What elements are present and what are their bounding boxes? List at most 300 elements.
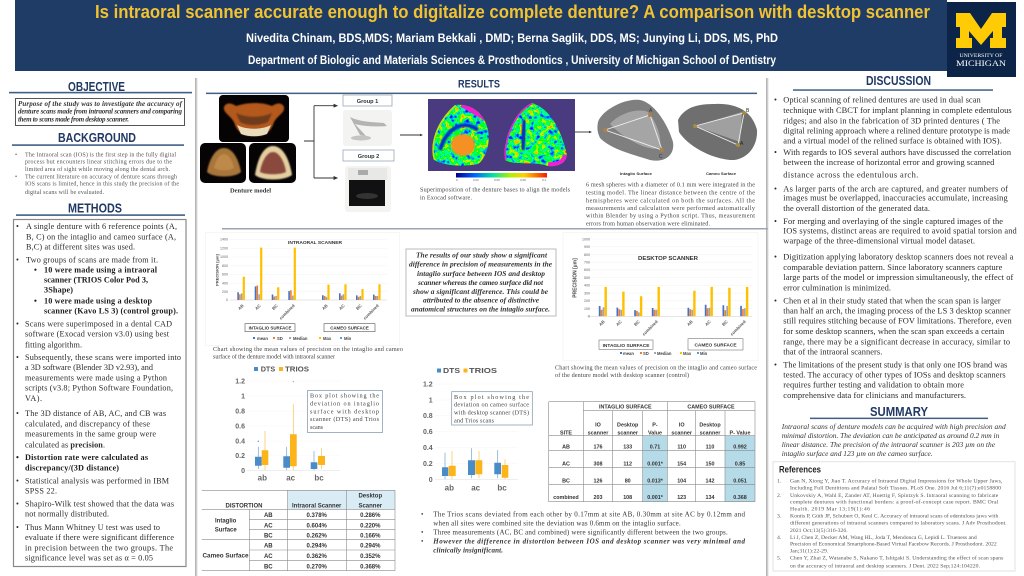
heat map: superimposition: 0.05 <box>494 178 500 182</box>
panel: methods: • <box>16 409 19 418</box>
table: precision by site: 176 <box>594 444 602 450</box>
heat map: superimposition <box>420 99 575 201</box>
panel: methods: scanner (Kavo LS 3) (control group). <box>44 306 178 315</box>
bar chart: intraoral scanner: 0 <box>226 298 228 302</box>
panel: discussion: IOS systems, distinct areas are required to avoid spatial torsion and <box>783 226 1018 235</box>
caption: desktop chart: Chart showing the mean values of precision on the intaglio and cameo surface <box>555 364 757 371</box>
box plot: cameo deviation: ab <box>445 483 454 492</box>
panel: methods: Shapiro-Wilk test showed that the data was <box>25 500 174 509</box>
panel: discussion: comprehensive data for clinicians and manufacturers. <box>783 391 966 400</box>
box plot: cameo deviation: 0 <box>429 477 433 484</box>
table: distortion: 0.362% <box>307 554 328 560</box>
bar chart: desktop scanner: 0 <box>588 314 590 318</box>
table: precision by site: 154 <box>677 461 686 467</box>
bar chart: desktop scanner: 400 <box>584 284 590 288</box>
category labels: combined <box>641 319 659 337</box>
category labels: BC <box>355 303 363 311</box>
panel: references: Including Full Dentitions and Palatal Soft Tissues. PLoS One. 2016 Jul 6;11(7):e0158800 <box>790 484 1001 491</box>
results bullet points: • <box>421 528 424 536</box>
category labels <box>598 319 747 337</box>
caption: desktop chart <box>555 364 757 379</box>
results bullet points: clinically insignificant. <box>433 546 503 554</box>
table: precision by site: scanner <box>671 430 693 436</box>
panel: methods: • <box>16 476 19 485</box>
caption: intraoral chart: Chart showing the mean values of precision on the intaglio and cameo <box>213 346 403 353</box>
panel: background: • <box>15 153 17 159</box>
table: distortion: 0.378% <box>307 513 328 519</box>
category labels: BC <box>633 319 641 327</box>
heat map: superimposition: 0.08 <box>520 178 526 182</box>
table: precision by site: 110 <box>706 444 714 450</box>
panel: methods: • <box>16 320 19 329</box>
table: precision by site: BC <box>562 478 570 484</box>
bar chart: desktop scanner: 1000 <box>582 237 590 241</box>
caption box: and Trios scans <box>454 417 495 424</box>
panel: discussion <box>774 74 1018 400</box>
panel: references: 5. <box>777 556 782 562</box>
heat map: superimposition: 0 <box>456 178 458 182</box>
table: precision by site: 134 <box>706 495 714 501</box>
table: precision by site: SITE <box>560 430 572 436</box>
results bullet points: However the difference in distortion between IOS and desktop scanner was very minimal and <box>432 537 746 545</box>
results bullet points <box>421 511 746 554</box>
bars: max <box>243 248 381 300</box>
callout: key result: show a significant difference. This could be <box>412 287 549 296</box>
denture model photos <box>200 95 296 195</box>
surface models with measurement triangles: B <box>746 108 750 114</box>
panel: references: 4. <box>777 535 782 541</box>
panel: references: on the accuracy of intraoral and desktop scanners. J Dent. 2022 Sep;124:104220. <box>790 562 981 569</box>
callout: key result: attributed to the absence of distinctive <box>423 296 540 305</box>
table: distortion: DISTORTION <box>226 503 262 509</box>
table: precision by site: IO <box>595 423 601 429</box>
panel: methods: • <box>34 266 37 275</box>
table: precision by site: 0.992 <box>733 444 747 450</box>
box plot: cameo deviation: 0.2 <box>423 461 433 468</box>
box plot: cameo deviation: 0.6 <box>423 429 433 436</box>
caption box: with desktop scanner (DTS) <box>454 409 529 416</box>
table: precision by site: 150 <box>706 461 714 467</box>
results bullet points: • <box>421 511 424 519</box>
category labels: combined <box>729 319 747 337</box>
panel: references: Jan;31(1):22-29. <box>790 547 829 554</box>
heading: methods: METHODS <box>68 202 122 216</box>
affiliation: Department of Biologic and Materials Sciences & Prosthodontics , University of Michigan School of Dentistry <box>248 53 776 67</box>
table: distortion: BC <box>264 533 273 539</box>
table: precision by site: scanner <box>617 430 639 436</box>
text: mesh spheres method: measurements and calculation were performed automatically <box>586 205 756 212</box>
results bullet points: • <box>421 537 424 545</box>
bar chart: intraoral scanner <box>206 232 400 346</box>
panel: objective: them to scans made from desktop scanner. <box>18 116 129 124</box>
panel: references: Chen Y, Zhai Z, Watanabe S, Nakano T, Ishigaki S. Understanding the effect of scan spans <box>790 555 1004 562</box>
panel: discussion: tested. The accuracy of other types of IOSs and desktop scanners <box>783 370 1006 379</box>
legend: TRIOS <box>469 366 497 375</box>
panel: methods: Scans were superimposed in a dental CAD <box>25 320 172 329</box>
callout: key result: scanner whereas the cameo surface did not <box>417 278 544 287</box>
heading: background: BACKGROUND <box>58 131 136 145</box>
panel: discussion: still requires stitching because of FOV limitations. Therefore, even <box>783 317 1013 326</box>
bar chart: desktop scanner: 300 <box>584 291 590 295</box>
table: precision by site: IO <box>679 423 685 429</box>
chart legend: mean <box>257 336 268 341</box>
table: precision by site: INTAGLIO SURFACE <box>599 405 652 411</box>
panel: methods: in precision between the two groups. The <box>25 543 173 552</box>
category labels: combined <box>278 303 296 321</box>
box plot: cameo deviation <box>423 366 532 492</box>
table: precision by site: Desktop <box>699 423 721 429</box>
text: mesh spheres method: 6 mesh spheres with a diameter of 0.1 mm were integrated in the <box>586 182 755 189</box>
chart legend: SD <box>277 336 283 341</box>
label: intaglio surface: INTAGLIO SURFACE <box>249 326 291 331</box>
panel: background: • <box>15 174 17 180</box>
caption box: deviation on intaglio <box>310 401 379 408</box>
table: distortion: 0.286% <box>360 513 381 519</box>
label: intaglio surface: Intaglio Surface <box>620 172 652 176</box>
bar chart: desktop scanner: 700 <box>584 260 590 264</box>
bar chart: desktop scanner: 500 <box>584 276 590 280</box>
caption: superimposition: Superimposition of the denture bases to align the models <box>420 187 571 194</box>
table: precision by site: AC <box>562 461 570 467</box>
panel: discussion: warpage of the three-dimensional virtual model dataset. <box>783 236 975 245</box>
panel: discussion: • <box>774 96 777 105</box>
panel: references: 2021 Oct;13(5):316-326. <box>790 527 848 534</box>
panel: methods: significance level was set as α = 0.05 <box>25 554 153 563</box>
panel: objective: Purpose of the study was to investigate the accuracy of <box>18 100 183 108</box>
heat map: superimposition: 0.02 <box>473 178 479 182</box>
bar chart: intraoral scanner: 1000 <box>220 255 228 259</box>
panel: methods: 10 were made using a desktop <box>44 296 152 305</box>
panel: discussion: Chen et al in their study stated that when the scan span is larger <box>783 296 1001 305</box>
panel: methods: evaluate if there were significant difference <box>25 533 174 542</box>
table: precision by site: 203 <box>594 495 602 501</box>
color scale <box>456 173 547 178</box>
bars: median <box>241 293 378 300</box>
table: precision by site: scanner <box>700 430 721 436</box>
panel: methods: • <box>16 353 19 362</box>
category labels: AB <box>598 319 606 327</box>
bar chart: desktop scanner: 900 <box>584 245 590 249</box>
table: distortion: 0.368% <box>360 564 381 570</box>
chart legend: mean <box>623 351 634 356</box>
heading: results: RESULTS <box>458 78 500 90</box>
chart title: INTRAORAL SCANNER <box>288 240 343 245</box>
table: distortion: AB <box>264 513 273 519</box>
table: distortion <box>202 490 395 571</box>
category labels: combined <box>362 303 380 321</box>
panel: references: 1. <box>777 479 782 485</box>
panel: methods: B,C) at different sites was used. <box>26 242 135 251</box>
bars: mean <box>237 286 375 300</box>
panel: background: process but encounters linear stitching errors due to the <box>25 160 172 166</box>
heading: references: References <box>779 464 821 475</box>
table: precision by site: 104 <box>677 478 686 484</box>
text: mesh spheres method <box>586 182 756 228</box>
table: distortion: Desktop <box>358 494 382 500</box>
group 1: intraoral scanner: Group 1 <box>357 99 378 105</box>
table: distortion: Surface <box>215 527 237 533</box>
bars: sd <box>239 286 376 300</box>
category labels: AC <box>704 319 712 327</box>
panel: methods: Two groups of scans are made from it. <box>26 255 158 264</box>
heat map: superimposition: 0.1 <box>542 178 547 182</box>
caption: intraoral chart: surface of the denture model with intraoral scanner <box>213 354 335 361</box>
chart legend: Median <box>657 351 672 356</box>
panel: methods: B, C) on the intaglio and cameo surface (A, <box>26 232 176 241</box>
authors: Nivedita Chinam, BDS,MDS; Mariam Bekkali , DMD; Berna Saglik, DDS, MS; Junying Li, DDS, MS, PhD <box>246 31 778 45</box>
table: distortion: 0.294% <box>307 544 328 550</box>
caption: desktop chart: of the denture model with desktop scanner (control) <box>555 372 689 379</box>
panel: references: complete dentures with functional borders: a proof-of-concept case report. BMC Oral <box>790 499 999 506</box>
box plot: intaglio deviation: 0.2 <box>235 453 245 460</box>
panel: references: 2. <box>777 493 782 499</box>
caption box: deviation on cameo surface <box>454 402 529 409</box>
caption: intraoral chart <box>213 346 403 361</box>
bar chart: desktop scanner: 800 <box>584 253 590 257</box>
box plot: intaglio deviation: bc <box>314 474 324 483</box>
table: precision by site: 0.71 <box>650 444 660 450</box>
panel: discussion: • <box>774 217 777 226</box>
bar chart: intraoral scanner: 800 <box>222 264 228 268</box>
chart legend: Median <box>293 336 308 341</box>
category labels: AB <box>321 303 329 311</box>
panel: references: different generations of intraoral scanners compared to laboratory scans. J Adv Prosthodont. <box>790 520 1007 527</box>
caption box: scanner (DTS) and Trios <box>310 416 380 423</box>
panel: objective <box>9 80 192 126</box>
surface models with measurement triangles: C <box>659 154 663 160</box>
panel: methods: The 3D distance of AB, AC, and CB was <box>25 409 166 418</box>
panel: discussion: the overall distortion of the generated data. <box>783 204 930 213</box>
table: precision by site <box>549 402 755 502</box>
table: precision by site: 80 <box>625 478 631 484</box>
bars: median <box>603 306 746 316</box>
table: distortion: 0.270% <box>307 564 328 570</box>
panel: discussion: As larger parts of the arch are captured, and greater numbers of <box>783 184 1008 193</box>
label: denture model: Denture model <box>230 189 271 195</box>
box plot: cameo deviation: 1.2 <box>423 382 433 388</box>
panel: methods: Subsequently, these scans were imported into <box>25 353 181 362</box>
panel: discussion: Optical scanning of relined dentures are used in dual scan <box>783 96 982 105</box>
table: distortion: 0.604% <box>307 523 328 529</box>
table: precision by site: 133 <box>623 444 632 450</box>
table: precision by site: 110 <box>677 444 686 450</box>
panel: discussion: • <box>774 184 777 193</box>
chart legend: Max <box>683 351 692 356</box>
results bullet points: The Trios scans deviated from each other by 0.17mm at site AB, 0.30mm at site AC by 0.12mm and <box>433 511 746 519</box>
text: mesh spheres method: hemispheres were calculated on both the surfaces. All the <box>586 197 755 204</box>
box plot: intaglio deviation: ac <box>286 474 296 483</box>
arrow to heat map <box>400 134 423 136</box>
panel: methods: • <box>16 523 19 532</box>
panel: methods: calculated, and discrepancy of these <box>25 420 150 429</box>
label: intaglio surface <box>599 340 653 349</box>
text: mesh spheres method: errors from human observation were eliminated. <box>586 221 710 228</box>
panel: methods: SPSS 22. <box>25 486 57 495</box>
header banner <box>15 0 947 71</box>
panel: methods: VA). <box>25 394 42 403</box>
surface models with measurement triangles <box>597 100 757 176</box>
text: mesh spheres method: within Blender by using a Python script. Thus, measurement <box>586 213 755 220</box>
panel: summary <box>781 405 1006 458</box>
logo: University of Michigan: UNIVERSITY OF <box>960 54 1003 59</box>
arrow to surface models <box>575 131 592 133</box>
panel: discussion: Digitization applying laboratory desktop scanners does not reveal a <box>783 252 1014 261</box>
panel: discussion: error culmination is minimized. <box>783 283 891 292</box>
panel: discussion: ridges; and also in the fabrication of 3D printed dentures ( The <box>783 117 1000 126</box>
panel: objective: denture scans made from intraoral scanners and comparing <box>18 108 182 116</box>
box plot: cameo deviation: 0.8 <box>423 413 433 420</box>
caption box: surface with desktop <box>310 408 379 415</box>
callout: key result <box>406 249 556 316</box>
panel: discussion: distance across the edentulous arch. <box>783 171 918 180</box>
panel: methods: measurements in the same group were <box>25 430 156 439</box>
panel: references: 3. <box>777 513 782 519</box>
panel: background: limited area of sight while moving along the dental arch. <box>25 166 170 173</box>
table: precision by site: Value <box>648 430 662 436</box>
panel: discussion: comparable deviation pattern. Since laboratory scanners capture <box>783 263 1003 272</box>
bars: max <box>604 287 748 316</box>
logo: University of Michigan: MICHIGAN <box>956 59 1006 68</box>
panel: background <box>12 131 184 196</box>
table: distortion: 0.352% <box>360 554 381 560</box>
panel: methods: A single denture with 6 reference points (A, <box>26 222 177 231</box>
panel: discussion: for some desktop scanners, when the scan span exceeds a certain <box>783 327 1005 336</box>
legend <box>437 366 497 375</box>
box plot: intaglio deviation: 0 <box>241 468 245 475</box>
text: mesh spheres method: testing model. The linear distance between the centre of the <box>586 189 755 196</box>
panel: discussion: images must be overlapped, inaccuracies accumulate, increasing <box>783 194 1009 203</box>
table: precision by site: CAMEO SURFACE <box>687 405 735 411</box>
box plot: intaglio deviation <box>235 364 382 483</box>
category labels: BC <box>721 319 729 327</box>
panel: references: Unkovskiy A, Wahl E, Zander AT, Huettig F, Spintzyk S. Intraoral scanning to fabricate <box>790 492 999 499</box>
category labels: AB <box>237 303 245 311</box>
legend: DTS <box>261 364 275 374</box>
bar chart: intraoral scanner: 1400 <box>220 238 228 242</box>
panel: summary: intaglio surface and 123 µm on the cameo surface. <box>782 449 933 458</box>
panel: methods: not normally distributed. <box>25 510 109 519</box>
table: precision by site: combined <box>553 495 579 501</box>
panel: discussion: • <box>774 148 777 157</box>
table: precision by site: 126 <box>594 478 602 484</box>
panel: methods: Distortion rate were calculated as <box>25 453 148 462</box>
panel: discussion: and a virtual model of the relined surface is obtained with IOS). <box>783 136 1002 145</box>
panel: methods: Thus Mann Whitney U test was used to <box>25 523 160 532</box>
bars: sd <box>601 308 744 316</box>
panel: methods: a 3D software (Blender 3D v2.93), and <box>25 363 153 372</box>
callout: key result: The results of our study show a significant <box>416 251 548 260</box>
category labels: AB <box>686 319 694 327</box>
label: intaglio surface: INTAGLIO SURFACE <box>603 343 650 349</box>
box plot: intaglio deviation: 1.2 <box>235 378 245 386</box>
label: cameo surface <box>324 324 375 332</box>
group 1: intraoral scanner <box>343 95 392 146</box>
logo: University of Michigan <box>947 2 1016 77</box>
panel: methods: • <box>16 453 19 462</box>
box plot: intaglio deviation: 1 <box>241 394 245 400</box>
bar chart: intraoral scanner: 200 <box>222 290 228 294</box>
panel: discussion: between the increase of horizontal error and growing scanned <box>783 158 995 167</box>
chart title: DESKTOP SCANNER <box>638 256 699 262</box>
label: cameo surface <box>688 339 743 350</box>
table: distortion: AB <box>264 544 273 550</box>
results bullet points: Three measurements (AC, BC and combined) were significantly different between the two groups. <box>433 528 728 536</box>
category labels: BC <box>271 303 279 311</box>
table: distortion: Scanner <box>358 503 383 509</box>
table: distortion: AC <box>264 523 273 529</box>
category labels: AC <box>615 319 623 327</box>
panel: references: Kontis P, Güth JF, Schubert O, Keul C. Accuracy of intraoral scans of edentulous jaws with <box>790 512 998 519</box>
panel: methods: Statistical analysis was performed in IBM <box>25 476 170 485</box>
caption box: Box plot showing the <box>310 393 379 400</box>
panel: background: The Intraoral scan (IOS) is the first step in the fully digital <box>25 152 176 159</box>
panel: methods <box>14 202 186 566</box>
legend <box>254 364 309 374</box>
group 2: desktop scanner: Group 2 <box>358 154 379 160</box>
bar chart: desktop scanner <box>563 232 758 360</box>
panel: methods: discrepancy/(3D distance) <box>25 463 119 472</box>
surface models with measurement triangles: A <box>740 141 744 147</box>
table: precision by site: 308 <box>594 461 602 467</box>
bar chart: intraoral scanner: 400 <box>222 282 228 286</box>
table: precision by site: 0.013* <box>647 478 664 484</box>
box plot: intaglio deviation: ab <box>258 474 267 483</box>
panel: discussion: technique with CBCT for implant planning in complete edentulous <box>783 106 1012 115</box>
table: precision by site: 142 <box>706 478 714 484</box>
category labels: AC <box>338 303 346 311</box>
callout: key result: intaglio surface between IOS and desktop <box>417 269 545 278</box>
table: distortion: 0.294% <box>360 544 381 550</box>
arrows: branching to groups <box>304 104 337 179</box>
caption box: Box plot showing the <box>454 394 529 401</box>
table: precision by site: P- <box>652 423 658 429</box>
table: distortion: 0.220% <box>360 523 381 529</box>
results bullet points: when all sites were combined site the deviation was 0.6mm on the intaglio surface. <box>433 520 681 528</box>
panel: references: Gan N, Xiong Y, Jiao T. Accuracy of Intraoral Digital Impressions for Whole Upper Jaws, <box>790 478 1003 485</box>
heading: discussion: DISCUSSION <box>866 74 931 88</box>
panel: background: digital scans will be evaluated. <box>25 190 104 196</box>
table: precision by site: 112 <box>623 461 632 467</box>
box plot: cameo deviation: 1 <box>429 398 433 404</box>
panel: methods: • <box>34 296 37 305</box>
panel: methods: calculated as precision. <box>25 440 105 449</box>
box plot: cameo deviation: ac <box>471 483 481 492</box>
panel: background: IOS scans is limited, hence in this study the precision of the <box>25 181 179 188</box>
bar chart: desktop scanner: 200 <box>584 299 590 303</box>
table: precision by site: AB <box>562 444 570 450</box>
panel: references: Precision of Economical Smartphone-Based Virtual Facebow Records. J Prosthodont. 2022 <box>790 540 997 547</box>
box plot: intaglio deviation: 0.8 <box>235 408 245 416</box>
panel: discussion: that of the intraoral scanners. <box>783 347 882 356</box>
table: distortion: Intaglio <box>215 518 237 524</box>
table: precision by site: 108 <box>623 495 632 501</box>
table: precision by site: 0.368 <box>733 495 747 501</box>
legend: TRIOS <box>285 364 309 374</box>
box plot: cameo deviation: bc <box>497 483 507 492</box>
chart legend: Min <box>700 351 708 356</box>
panel: discussion: range, there may be a significant decrease in accuracy, similar to <box>783 337 1010 346</box>
table: precision by site: 0.001* <box>647 495 664 501</box>
panel: discussion: • <box>774 252 777 261</box>
panel: discussion: • <box>774 360 777 369</box>
panel: discussion: requires further testing and validation to obtain more <box>783 381 964 390</box>
chart legend: Max <box>323 336 332 341</box>
chart legend <box>253 336 352 341</box>
label: cameo surface: Cameo Surface <box>706 172 736 176</box>
panel: methods: software (Exocad version v3.0) using best <box>25 330 170 339</box>
table: distortion: Intraoral Scanner <box>292 503 342 509</box>
panel: discussion: than half an arch, the imaging process of the LS 3 desktop scanner <box>783 306 1011 315</box>
